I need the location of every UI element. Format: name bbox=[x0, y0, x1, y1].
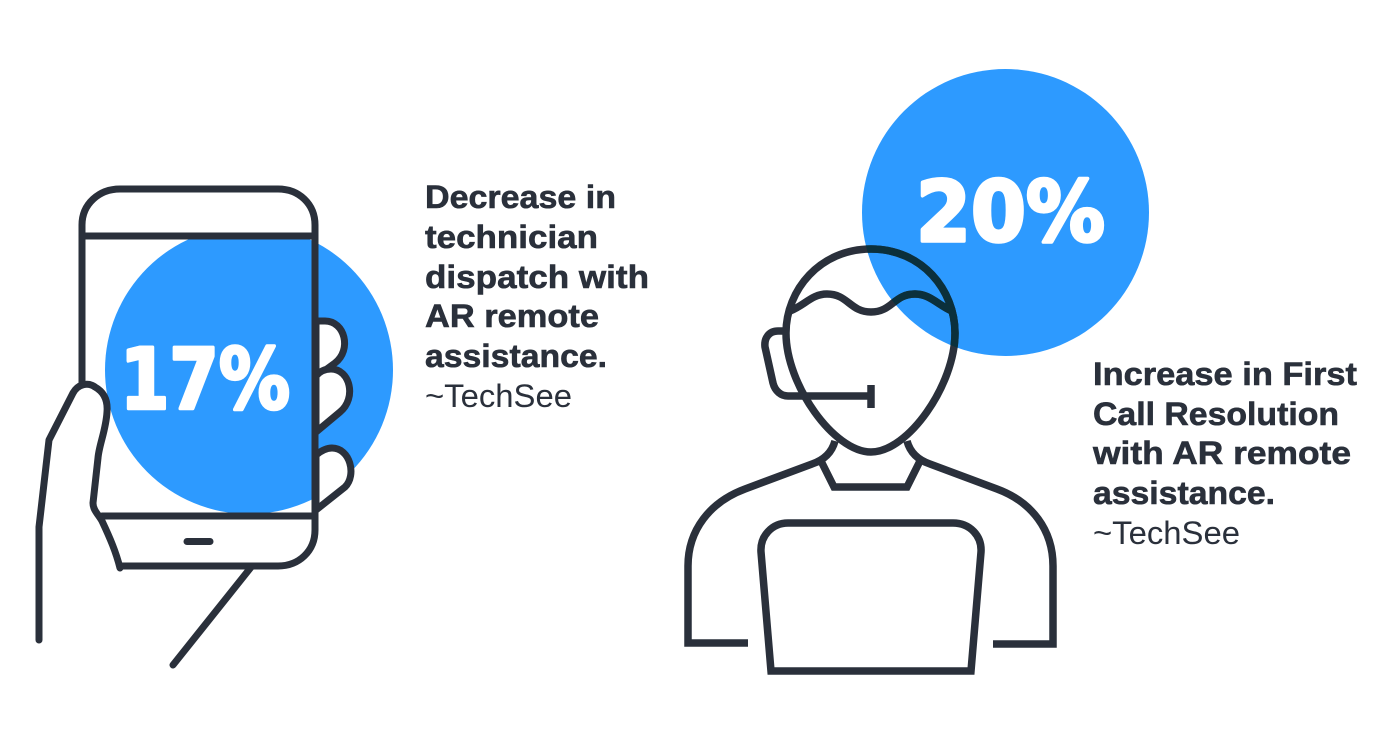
icon: call agent with headset bbox=[688, 249, 1053, 671]
phone body bbox=[82, 189, 315, 566]
laptop bbox=[761, 523, 981, 671]
text block: decrease in technician dispatch bbox=[425, 179, 649, 414]
text block: decrease in technician dispatch: Decrease in bbox=[425, 179, 616, 215]
percentage 17%: 17% bbox=[120, 330, 290, 428]
head and hair overlap on circle bbox=[866, 245, 959, 348]
infographic canvas bbox=[36, 69, 1357, 675]
text block: increase in first call resolution: Call Resolution bbox=[1093, 396, 1339, 432]
microphone bbox=[867, 385, 875, 408]
text block: decrease in technician dispatch: AR remote bbox=[425, 298, 599, 334]
panel: technician dispatch statistic bbox=[39, 179, 649, 665]
text block: decrease in technician dispatch: technician bbox=[425, 219, 598, 255]
head bbox=[786, 249, 955, 452]
headset bbox=[765, 331, 871, 396]
hair bbox=[790, 294, 952, 312]
text block: increase in first call resolution bbox=[1092, 356, 1357, 551]
text block: decrease in technician dispatch: assistance. bbox=[425, 338, 607, 374]
shoulders bbox=[688, 441, 835, 643]
text block: increase in first call resolution: Increase in First bbox=[1093, 356, 1357, 392]
text block: increase in first call resolution: with AR remote bbox=[1092, 435, 1351, 471]
panel: first call resolution statistic bbox=[688, 69, 1357, 671]
phone home button bbox=[187, 538, 210, 545]
text block: decrease in technician dispatch: ~TechSee bbox=[425, 378, 572, 414]
thumb and wrist bbox=[39, 384, 120, 640]
forearm line bbox=[173, 566, 252, 665]
text block: decrease in technician dispatch: dispatch with bbox=[425, 259, 649, 295]
text block: increase in first call resolution: ~TechSee bbox=[1093, 515, 1240, 551]
blue circle bbox=[862, 69, 1149, 356]
fingers bbox=[316, 321, 351, 510]
percentage 20%: 20% bbox=[916, 163, 1105, 261]
collar bbox=[821, 461, 920, 487]
icon: hand holding phone bbox=[39, 189, 351, 665]
blue circle behind phone bbox=[105, 226, 393, 514]
text block: increase in first call resolution: assistance. bbox=[1093, 475, 1275, 511]
